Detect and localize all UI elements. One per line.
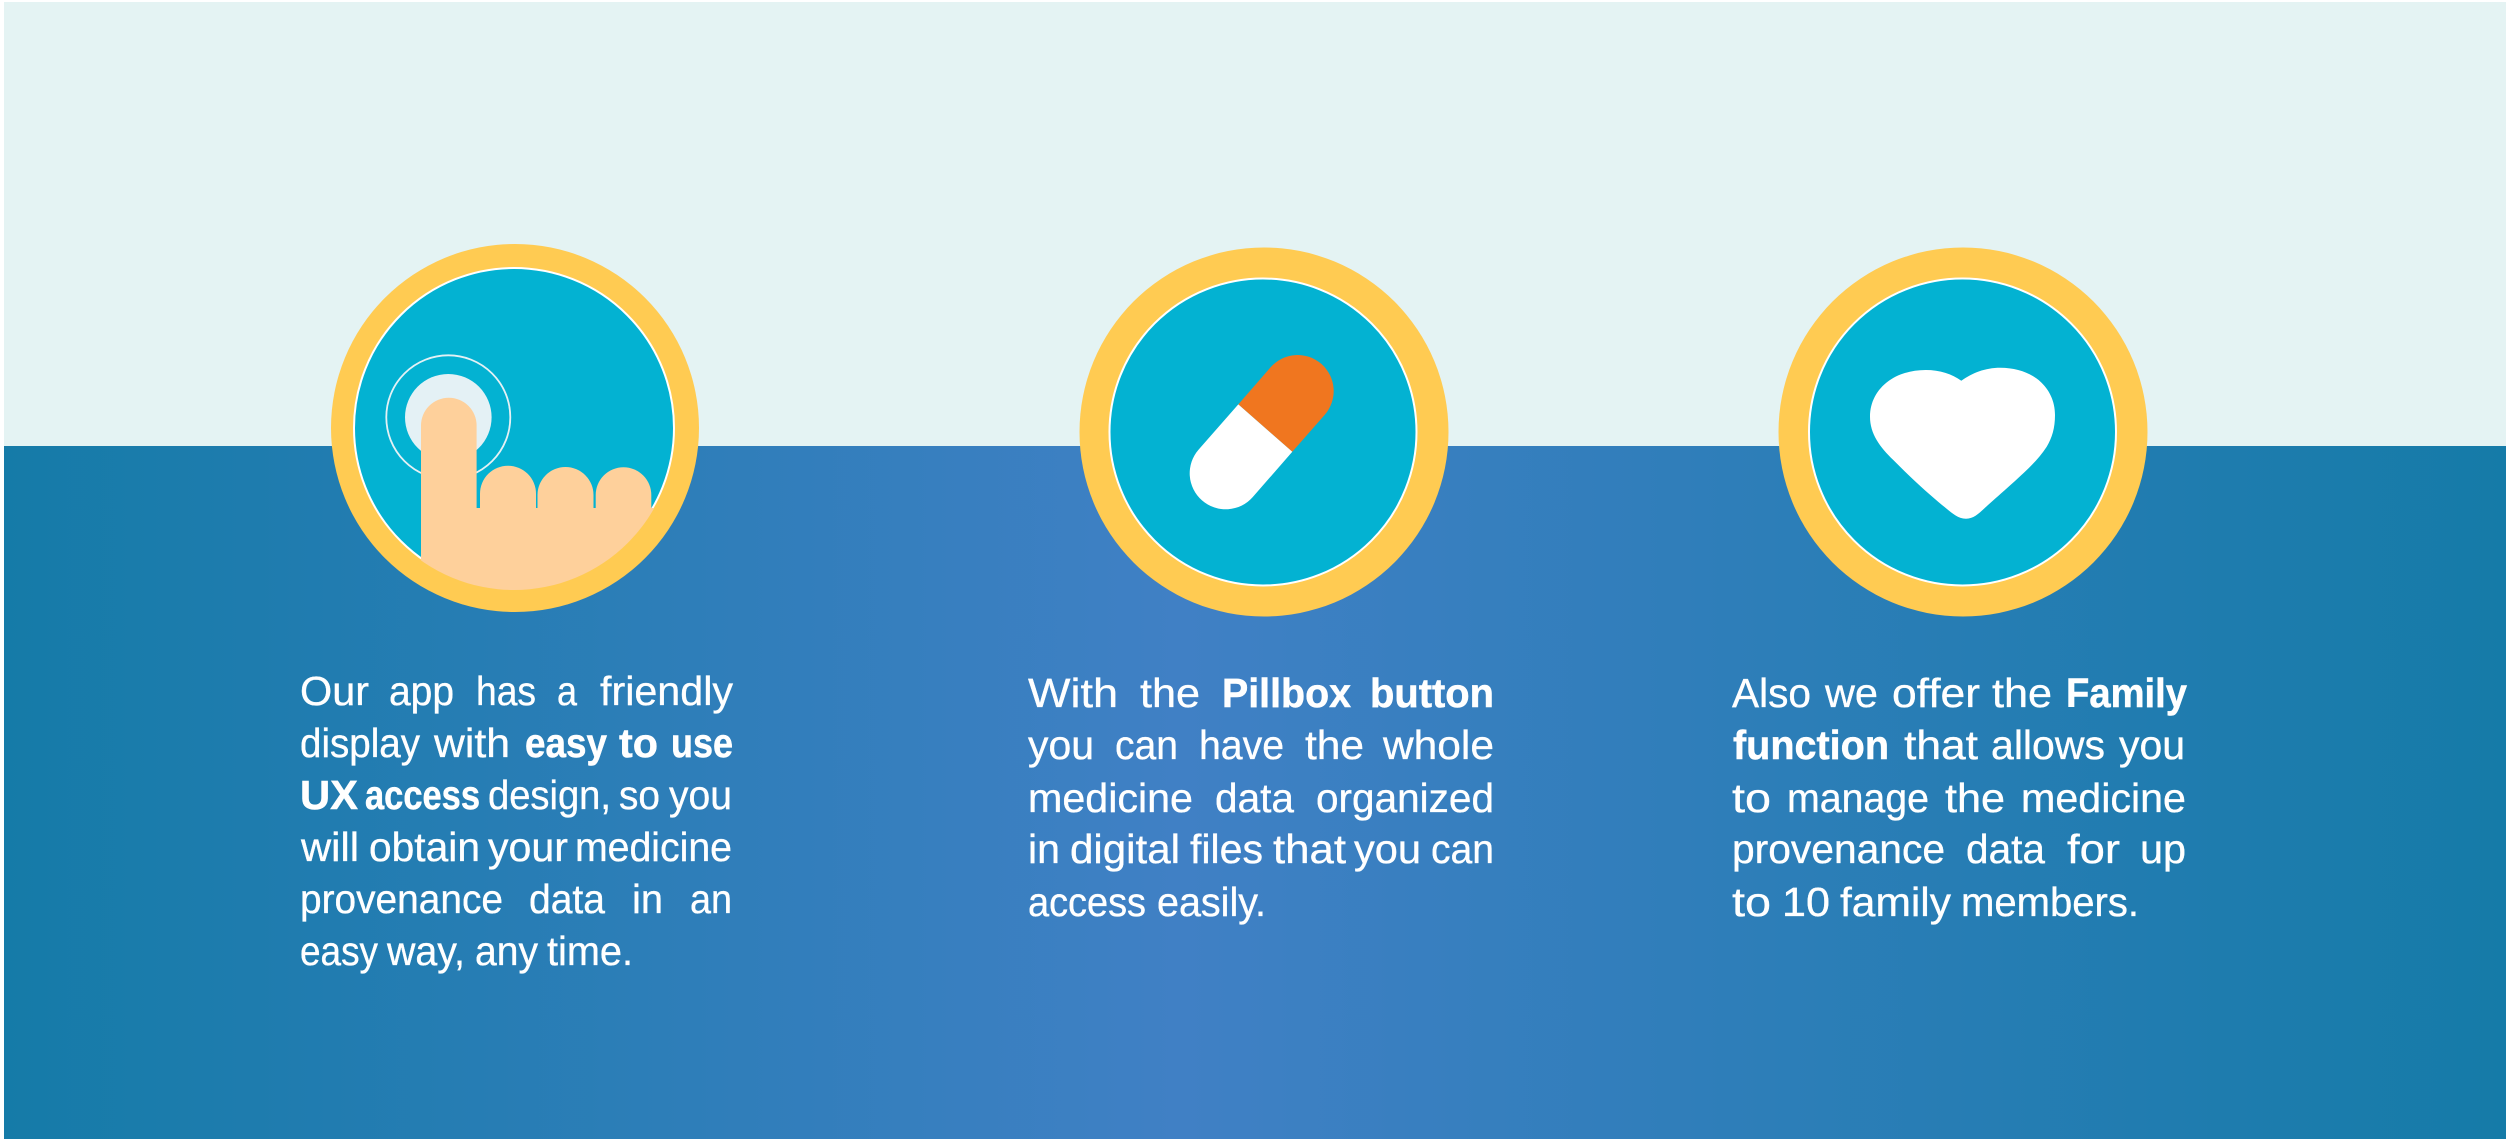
text block: Pillbox button: data [1215, 775, 1294, 821]
text block: Pillbox button: Pillbox [1222, 670, 1351, 716]
text block: Pillbox button: digital [1070, 826, 1180, 872]
text block: Pillbox button: whole [1382, 722, 1494, 768]
text block: easy to use UX: way, [386, 928, 465, 974]
text block: Family function: function [1733, 722, 1889, 768]
text block: Family function: medicine [2021, 775, 2186, 821]
text block: Pillbox button: access [1028, 879, 1146, 925]
text block: Pillbox button: in [1028, 826, 1060, 872]
text block: easy to use UX: Our [300, 668, 369, 714]
text block: Pillbox button: easily. [1157, 879, 1266, 925]
text block: easy to use UX [300, 668, 734, 974]
panel: blue gradient lower band [4, 446, 2506, 1139]
text block: Pillbox button: you [1354, 826, 1421, 872]
text block: Family function: 10 [1782, 879, 1830, 925]
icon: heart badge [1778, 248, 2148, 616]
text block: Family function: the [1945, 775, 2005, 821]
text block: easy to use UX: design, [488, 772, 611, 818]
text block: easy to use UX: provenance [300, 876, 503, 922]
panel: light top band [4, 2, 2506, 446]
text block: easy to use UX: you [669, 772, 732, 818]
text block: Family function: you [2119, 722, 2185, 768]
text block: Pillbox button: With [1028, 670, 1118, 716]
text block: easy to use UX: easy [525, 720, 607, 766]
text block: Family function: offer [1892, 670, 1980, 716]
text block: easy to use UX: UX [300, 772, 358, 818]
text block: Family function: the [1992, 670, 2052, 716]
text block: Pillbox button: have [1199, 722, 1284, 768]
text block: Family function: data [1966, 826, 2045, 872]
text block: Pillbox button: the [1140, 670, 1200, 716]
text block: Pillbox button: can [1115, 722, 1178, 768]
text block: Family function: provenance [1732, 826, 1945, 872]
text block: easy to use UX: easy [300, 928, 378, 974]
text block: Pillbox button: organized [1316, 775, 1494, 821]
text block: Family function: that [1904, 722, 1979, 768]
text block: Pillbox button: that [1273, 826, 1347, 872]
text block: Family function: up [2140, 826, 2186, 872]
text block: Pillbox button: can [1431, 826, 1494, 872]
text block: easy to use UX: will [300, 824, 359, 870]
text block: Pillbox button [1028, 670, 1494, 925]
text block: Family function: manage [1787, 775, 1929, 821]
text block: easy to use UX: friendly [600, 668, 734, 714]
text block: Pillbox button: you [1028, 722, 1094, 768]
text block: easy to use UX: data [529, 876, 605, 922]
text block: Family function: Also [1732, 670, 1811, 716]
text block: Family function: family [1840, 879, 1952, 925]
icon: pill capsule badge [1080, 248, 1448, 616]
text block: easy to use UX: has [476, 668, 536, 714]
text block: easy to use UX: app [389, 668, 454, 714]
text block: easy to use UX: use [671, 720, 733, 766]
text block: easy to use UX: so [619, 772, 660, 818]
text block: easy to use UX: with [433, 720, 510, 766]
text block: easy to use UX: access [365, 772, 480, 818]
text block: Family function: members. [1961, 879, 2139, 925]
text block: easy to use UX: an [690, 876, 732, 922]
icon: tapping hand badge [331, 244, 699, 612]
text block: Pillbox button: medicine [1028, 775, 1193, 821]
text block: easy to use UX: display [300, 720, 420, 766]
text block: Family function: allows [1991, 722, 2105, 768]
text block: Family function: Family [2066, 670, 2187, 716]
text block: easy to use UX: time. [547, 928, 633, 974]
text block: Family function: for [2067, 826, 2120, 872]
text block: Family function: we [1824, 670, 1878, 716]
text block: easy to use UX: your [488, 824, 568, 870]
text block: easy to use UX: any [475, 928, 538, 974]
text block: easy to use UX: to [619, 720, 658, 766]
text block: easy to use UX: in [632, 876, 663, 922]
text block: easy to use UX: obtain [369, 824, 480, 870]
text block: Pillbox button: the [1305, 722, 1364, 768]
text block: Pillbox button: button [1370, 670, 1494, 716]
text block: Family function [1732, 670, 2187, 925]
text block: easy to use UX: a [557, 668, 577, 714]
text block: Pillbox button: files [1190, 826, 1263, 872]
text block: Family function: to [1732, 879, 1771, 925]
text block: easy to use UX: medicine [575, 824, 732, 870]
text block: Family function: to [1732, 775, 1771, 821]
